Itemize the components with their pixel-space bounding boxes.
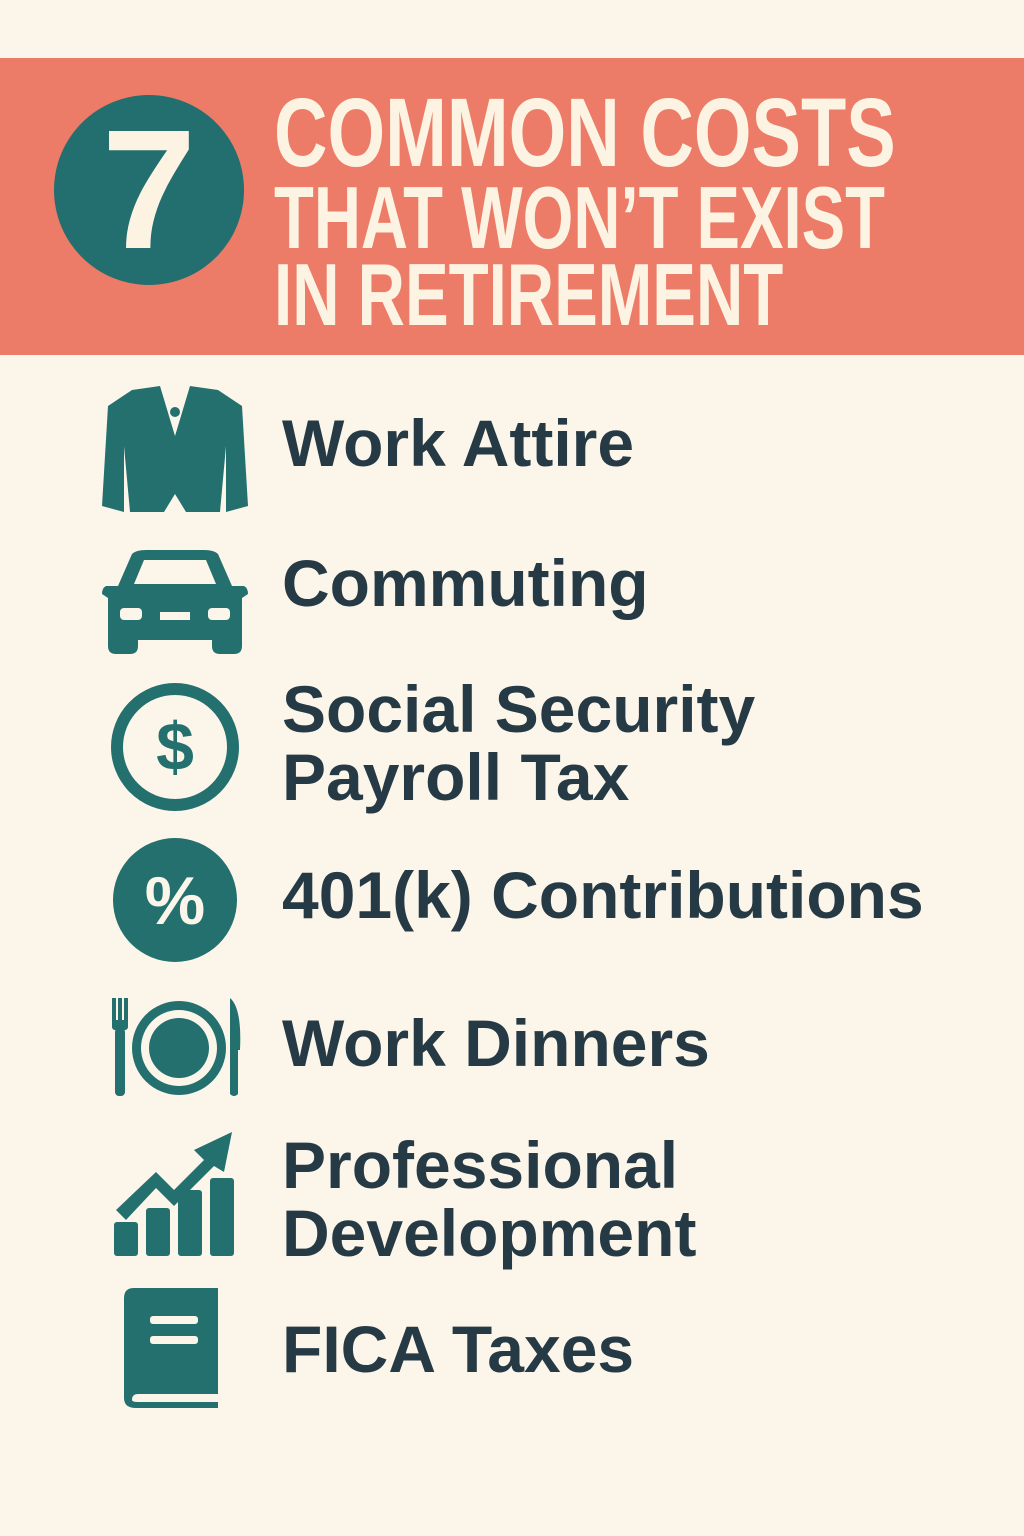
icon: book (124, 1288, 218, 1408)
text: Professional Development (282, 1128, 696, 1270)
text: 401(k) Contributions: 401(k) Contributions (282, 858, 924, 932)
icon: plate and cutlery (112, 998, 240, 1096)
text: Work Attire: Work Attire (282, 406, 634, 480)
title: THAT WON’T EXIST (274, 168, 885, 267)
icon: car (102, 550, 248, 654)
title: IN RETIREMENT (274, 245, 783, 344)
icon: dollar coin (111, 683, 239, 811)
header banner (0, 58, 1024, 355)
icon: percent: % (145, 863, 205, 939)
text: Social Security Payroll Tax (282, 672, 755, 814)
title (274, 78, 896, 344)
icon: suit (102, 386, 248, 512)
number badge (54, 95, 244, 285)
text: Social Security Payroll Tax: Payroll Tax (282, 740, 629, 814)
icon: percent (113, 838, 237, 962)
title: COMMON COSTS (274, 78, 896, 187)
number badge: 7 (102, 95, 196, 285)
text: Professional Development: Professional (282, 1128, 678, 1202)
text: Commuting: Commuting (282, 546, 649, 620)
text: FICA Taxes: FICA Taxes (282, 1312, 634, 1386)
text: Professional Development: Development (282, 1196, 696, 1270)
text: Work Dinners: Work Dinners (282, 1006, 710, 1080)
icon: dollar coin: $ (156, 709, 194, 785)
text: Social Security Payroll Tax: Social Security (282, 672, 755, 746)
icon: growth chart (114, 1132, 234, 1256)
